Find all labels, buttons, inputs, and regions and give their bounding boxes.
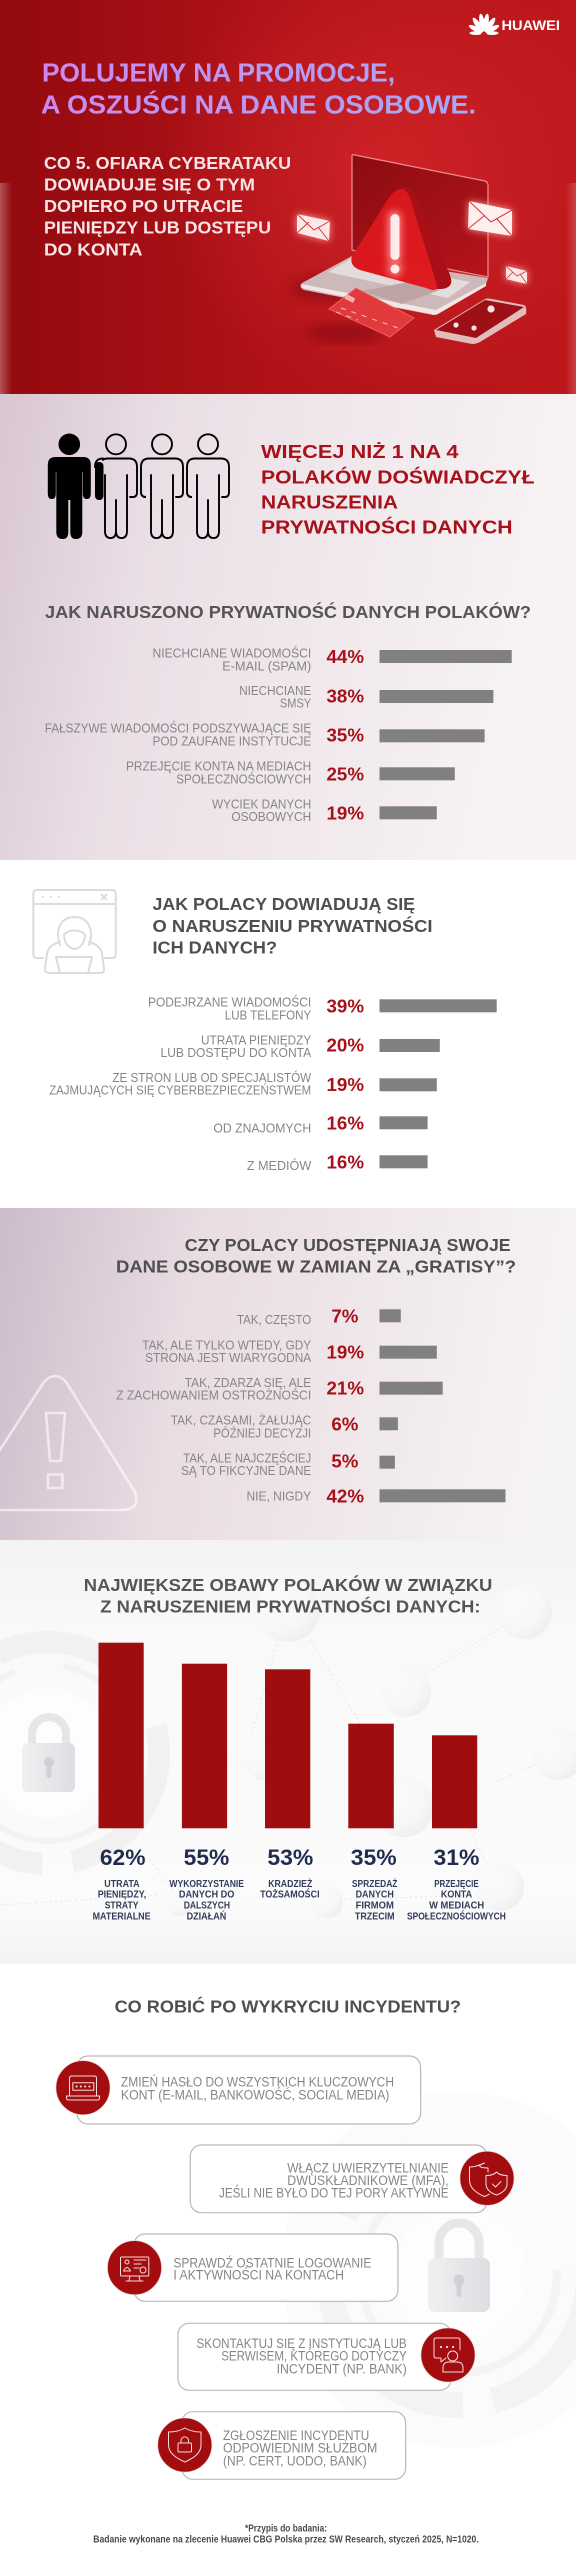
icon: warning triangle outline: [0, 1376, 136, 1510]
heading: JAK POLACY DOWIADUJĄ SIĘ: [152, 894, 415, 914]
row 20%: LUB DOSTĘPU DO KONTA: [160, 1045, 311, 1060]
envelopes: [297, 201, 527, 284]
row 19%: 19%: [326, 1342, 364, 1363]
heading: more than 1 in 4: PRYWATNOŚCI DANYCH: [261, 517, 512, 538]
step: report incident: ODPOWIEDNIM SŁUŻBOM: [223, 2441, 377, 2456]
column 35%: SPRZEDAŻ: [352, 1877, 398, 1890]
credit card: [329, 288, 414, 337]
row 5%: TAK, ALE NAJCZĘŚCIEJ: [183, 1450, 311, 1465]
panel: privacy breaches: [0, 394, 576, 860]
phone: [434, 298, 526, 344]
heading: NAJWIĘKSZE OBAWY POLAKÓW W ZWIĄZKU: [84, 1574, 492, 1595]
step: contact institution: INCYDENT (NP. BANK): [277, 2361, 407, 2376]
row 35%: POD ZAUFANE INSTYTUCJE: [152, 733, 311, 748]
heading: how privacy was breached: JAK NARUSZONO PRYWATNOŚĆ DANYCH POLAKÓW?: [45, 601, 531, 622]
column 53%: 53%: [267, 1845, 313, 1870]
step: contact institution: SERWISEM, KTÓREGO DOTYCZY: [221, 2349, 407, 2364]
bar chart: sources: [49, 995, 497, 1173]
row 21%: Z ZACHOWANIEM OSTROŻNOŚCI: [116, 1388, 311, 1403]
column 31%: SPOŁECZNOŚCIOWYCH: [407, 1909, 506, 1922]
column 55%: DALSZYCH: [184, 1901, 230, 1912]
row 42%: 42%: [326, 1486, 364, 1507]
panel: biggest fears: [0, 1540, 576, 1964]
row 21%: [116, 1375, 443, 1403]
row 35%: [45, 721, 485, 748]
bar chart: fears: [93, 1643, 506, 1922]
row 5%: [181, 1450, 395, 1478]
icon: shield with lock: [168, 2428, 201, 2462]
logo: Huawei: HUAWEI: [502, 18, 560, 33]
step: check logins: SPRAWDŹ OSTATNIE LOGOWANIE: [173, 2255, 371, 2270]
title: POLUJEMY NA PROMOCJE,: [42, 60, 395, 88]
icon: padlock: [428, 2223, 490, 2312]
title: A OSZUŚCI NA DANE OSOBOWE.: [41, 89, 476, 119]
heading: more than 1 in 4: WIĘCEJ NIŻ 1 NA 4: [261, 441, 459, 462]
column 35%: TRZECIM: [355, 1911, 395, 1922]
row 20%: UTRATA PIENIĘDZY: [201, 1032, 311, 1047]
row 35%: FAŁSZYWE WIADOMOŚCI PODSZYWAJĄCE SIĘ: [45, 721, 311, 736]
column 31%: 31%: [434, 1845, 479, 1870]
panel: sharing data for freebies: [0, 1208, 576, 1540]
step: change passwords: [56, 2056, 421, 2124]
row 16% friends: [213, 1112, 428, 1135]
row 39%: LUB TELEFONY: [225, 1007, 311, 1022]
column 35%: [348, 1724, 398, 1922]
heading: DANE OSOBOWE W ZAMIAN ZA „GRATISY”?: [116, 1257, 516, 1277]
row 44%: 44%: [326, 646, 364, 667]
heading: more than 1 in 4: POLAKÓW DOŚWIADCZYŁ: [261, 466, 534, 487]
subtitle: DOWIADUJE SIĘ O TYM: [44, 174, 255, 194]
heading: ICH DANYCH?: [152, 937, 277, 957]
heading: [116, 1235, 516, 1277]
step: contact institution: SKONTAKTUJ SIĘ Z INSTYTUCJĄ LUB: [196, 2336, 407, 2351]
illustration: laptop with warning triangle: [290, 155, 527, 344]
row 19%: ZE STRON LUB OD SPECJALISTÓW: [112, 1070, 312, 1085]
footnote: [93, 2524, 479, 2546]
column 62%: PIENIĘDZY,: [98, 1890, 146, 1901]
step: report incident: (NP. CERT, UODO, BANK): [223, 2453, 367, 2468]
step: report incident: ZGŁOSZENIE INCYDENTU: [223, 2428, 369, 2443]
row 7%: TAK, CZĘSTO: [237, 1312, 311, 1327]
bar chart: sharing answers: [116, 1306, 505, 1507]
row 44%: [152, 646, 512, 673]
icon: monitor with profile: [120, 2257, 149, 2281]
subtitle: DO KONTA: [44, 239, 143, 259]
row 21%: TAK, ZDARZA SIĘ, ALE: [185, 1375, 311, 1390]
row 44%: E-MAIL (SPAM): [222, 658, 311, 673]
row 20%: [160, 1032, 440, 1060]
icon: hacker in a window: [33, 890, 116, 973]
subtitle: [44, 153, 291, 259]
row 20%: 20%: [326, 1035, 364, 1056]
column 53%: KRADZIEŻ: [268, 1877, 312, 1890]
column 55%: 55%: [184, 1845, 229, 1870]
row 21%: 21%: [326, 1378, 364, 1399]
column 35%: DANYCH: [356, 1890, 394, 1901]
step: enable MFA: WŁĄCZ UWIERZYTELNIANIE: [287, 2160, 449, 2175]
column 62%: [93, 1643, 151, 1922]
row 42%: NIE, NIGDY: [246, 1489, 311, 1504]
row 6%: PÓŹNIEJ DECYZJI: [213, 1425, 311, 1440]
row 25%: SPOŁECZNOŚCIOWYCH: [176, 771, 311, 786]
row 39%: PODEJRZANE WIADOMOŚCI: [148, 995, 311, 1010]
laptop screen: [352, 155, 488, 277]
row 25%: 25%: [326, 763, 364, 784]
heading: Z NARUSZENIEM PRYWATNOŚCI DANYCH:: [100, 1596, 481, 1617]
row 19%: [49, 1070, 437, 1098]
icon: laptop password: [66, 2076, 100, 2100]
laptop base: [300, 256, 488, 315]
heading: [152, 894, 432, 957]
column 62%: STRATY: [105, 1901, 139, 1912]
title: [41, 60, 476, 119]
column 35%: FIRMOM: [356, 1901, 394, 1912]
icon: two shields: [470, 2163, 507, 2196]
row 16% media: 16%: [326, 1151, 364, 1172]
panel: what to do after an incident: [0, 1964, 576, 2560]
warning triangle: [351, 187, 451, 290]
row 39%: 39%: [326, 995, 364, 1016]
panel: how Poles find out: [0, 860, 576, 1208]
row 19%: OSOBOWYCH: [231, 809, 311, 824]
footnote: *Przypis do badania:: [245, 2524, 327, 2535]
column 62%: 62%: [100, 1845, 146, 1870]
subtitle: CO 5. OFIARA CYBERATAKU: [44, 153, 291, 173]
row 19%: TAK, ALE TYLKO WTEDY, GDY: [142, 1337, 311, 1352]
row 19%: WYCIEK DANYCH: [212, 796, 311, 811]
column 55%: DANYCH DO: [179, 1890, 235, 1901]
column 53%: TOŻSAMOŚCI: [260, 1888, 320, 1901]
row 5%: SĄ TO FIKCYJNE DANE: [181, 1463, 311, 1478]
row 38%: [239, 683, 493, 711]
row 7%: [237, 1306, 401, 1327]
row 16% friends: OD ZNAJOMYCH: [213, 1120, 311, 1135]
row 38%: SMSY: [280, 696, 311, 711]
icon: padlock: [22, 1717, 75, 1792]
row 25%: PRZEJĘCIE KONTA NA MEDIACH: [126, 759, 311, 774]
step: change passwords: ZMIEŃ HASŁO DO WSZYSTKICH KLUCZOWYCH: [121, 2075, 394, 2090]
column 31%: [407, 1735, 506, 1922]
step: change passwords: KONT (E-MAIL, BANKOWOŚĆ, SOCIAL MEDIA): [121, 2087, 389, 2102]
column 55%: WYKORZYSTANIE: [169, 1879, 244, 1890]
row 16% media: [247, 1151, 428, 1173]
row 44%: NIECHCIANE WIADOMOŚCI: [152, 646, 311, 661]
row 16% friends: 16%: [326, 1112, 364, 1133]
row 19%: STRONA JEST WIARYGODNA: [145, 1350, 311, 1365]
column 62%: MATERIALNE: [93, 1911, 151, 1922]
step: check logins: [108, 2234, 398, 2301]
row 19%: 19%: [326, 802, 364, 823]
column 55%: DZIAŁAŃ: [187, 1909, 226, 1922]
bar chart: breach types: [45, 646, 512, 824]
icon: person with speech bubble: [434, 2338, 463, 2372]
step: check logins: I AKTYWNOŚCI NA KONTACH: [173, 2268, 344, 2283]
row 6%: TAK, CZASAMI, ŻAŁUJĄC: [171, 1413, 311, 1428]
icon: one in four people: [48, 434, 229, 539]
subtitle: DOPIERO PO UTRACIE: [44, 196, 243, 216]
column 31%: PRZEJĘCIE: [434, 1879, 479, 1890]
panel: hero: [0, 0, 576, 394]
row 42%: [246, 1486, 506, 1507]
column 62%: UTRATA: [104, 1879, 140, 1890]
row 38%: NIECHCIANE: [239, 683, 311, 698]
row 38%: 38%: [326, 685, 364, 706]
step: enable MFA: JEŚLI NIE BYŁO DO TEJ PORY AKTYWNE: [219, 2186, 449, 2201]
row 5%: 5%: [331, 1450, 358, 1471]
footnote: Badanie wykonane na zlecenie Huawei CBG Polska przez SW Research, styczeń 2025, N=1020.: [93, 2535, 479, 2546]
heading: more than 1 in 4: [261, 441, 534, 538]
background: network and lock: [0, 1578, 576, 1918]
heading: CO ROBIĆ PO WYKRYCIU INCYDENTU?: [115, 1996, 461, 2017]
heading: CZY POLACY UDOSTĘPNIAJĄ SWOJE: [185, 1235, 511, 1255]
row 39%: [148, 995, 497, 1022]
column 55%: [169, 1664, 244, 1922]
column 31%: W MEDIACH: [429, 1901, 484, 1912]
row 19%: [212, 796, 437, 824]
step: contact institution: [178, 2323, 475, 2390]
row 19%: 19%: [326, 1074, 364, 1095]
row 25%: [126, 759, 455, 786]
subtitle: PIENIĘDZY LUB DOSTĘPU: [44, 218, 271, 238]
logo: Huawei: [468, 13, 560, 35]
background: padlock with rings: [281, 2092, 576, 2448]
column 31%: KONTA: [441, 1890, 472, 1901]
step: enable MFA: [190, 2145, 514, 2213]
row 35%: 35%: [326, 725, 364, 746]
row 6%: [171, 1413, 398, 1440]
row 7%: 7%: [331, 1306, 358, 1327]
heading: [84, 1574, 492, 1617]
row 6%: 6%: [331, 1414, 358, 1435]
heading: more than 1 in 4: NARUSZENIA: [261, 492, 398, 513]
heading: O NARUSZENIU PRYWATNOŚCI: [152, 915, 432, 936]
row 19%: ZAJMUJĄCYCH SIĘ CYBERBEZPIECZEŃSTWEM: [49, 1083, 311, 1098]
person solid: [48, 434, 91, 539]
step: enable MFA: DWUSKŁADNIKOWE (MFA),: [287, 2173, 449, 2188]
column 35%: 35%: [351, 1845, 397, 1870]
step: report incident: [158, 2412, 406, 2479]
column 53%: [260, 1669, 320, 1901]
row 16% media: Z MEDIÓW: [247, 1158, 312, 1173]
row 19%: [142, 1337, 437, 1365]
